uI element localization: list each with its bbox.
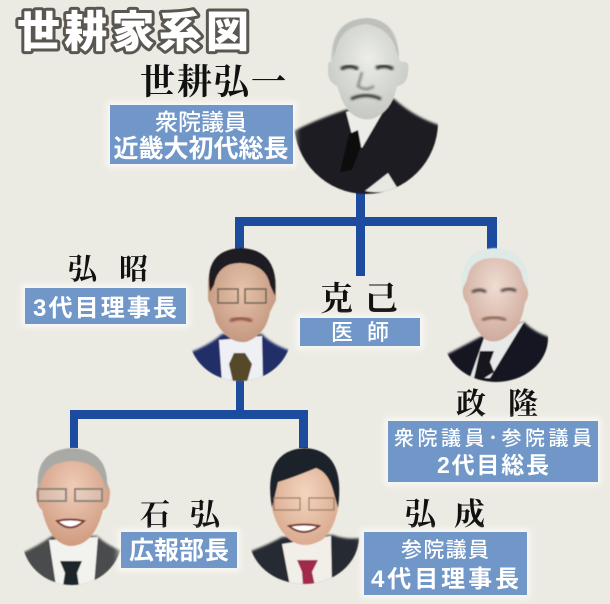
label box: 弘成 [361,529,530,598]
label box: 政隆 [385,418,601,485]
label box: 弘昭: 3代目理事長 [33,295,177,322]
title: 世耕家系図 [17,9,249,57]
name: 世耕弘一: 世耕弘一 [140,63,286,102]
label box: 克己 [297,315,423,349]
portrait: 政隆 [440,248,552,385]
portrait: 弘昭 [192,247,289,382]
portrait: 石弘 [20,448,124,590]
label box: 広報部長 [118,529,240,571]
label box: 広報部長: 広報部長 [129,537,229,565]
label box: 弘成: 参院議員 [401,539,489,562]
label box: 政隆: 衆院議員･参院議員 [394,427,592,450]
label box: 弘昭 [22,285,189,327]
name: 克己: 克己 [320,281,398,318]
name: 弘成: 弘成 [405,497,485,532]
title: 世耕家系図 [17,9,249,57]
family tree connector lines [70,180,497,448]
label box: 克己: 医師 [331,320,389,345]
label box: 政隆: 2代目総長 [437,452,549,478]
label box: 世耕弘一: 衆院議員 [155,109,247,135]
name: 弘昭: 弘昭 [68,253,148,286]
portrait: 世耕弘一 [292,18,442,200]
name: 政隆: 政隆 [456,388,538,421]
name: 石弘: 石弘 [140,499,223,532]
label box: 世耕弘一: 近畿大初代総長 [114,135,288,163]
portrait: 弘成 [246,448,362,590]
label box: 世耕弘一 [107,102,296,167]
label box: 弘成: 4代目理事長 [371,566,519,593]
